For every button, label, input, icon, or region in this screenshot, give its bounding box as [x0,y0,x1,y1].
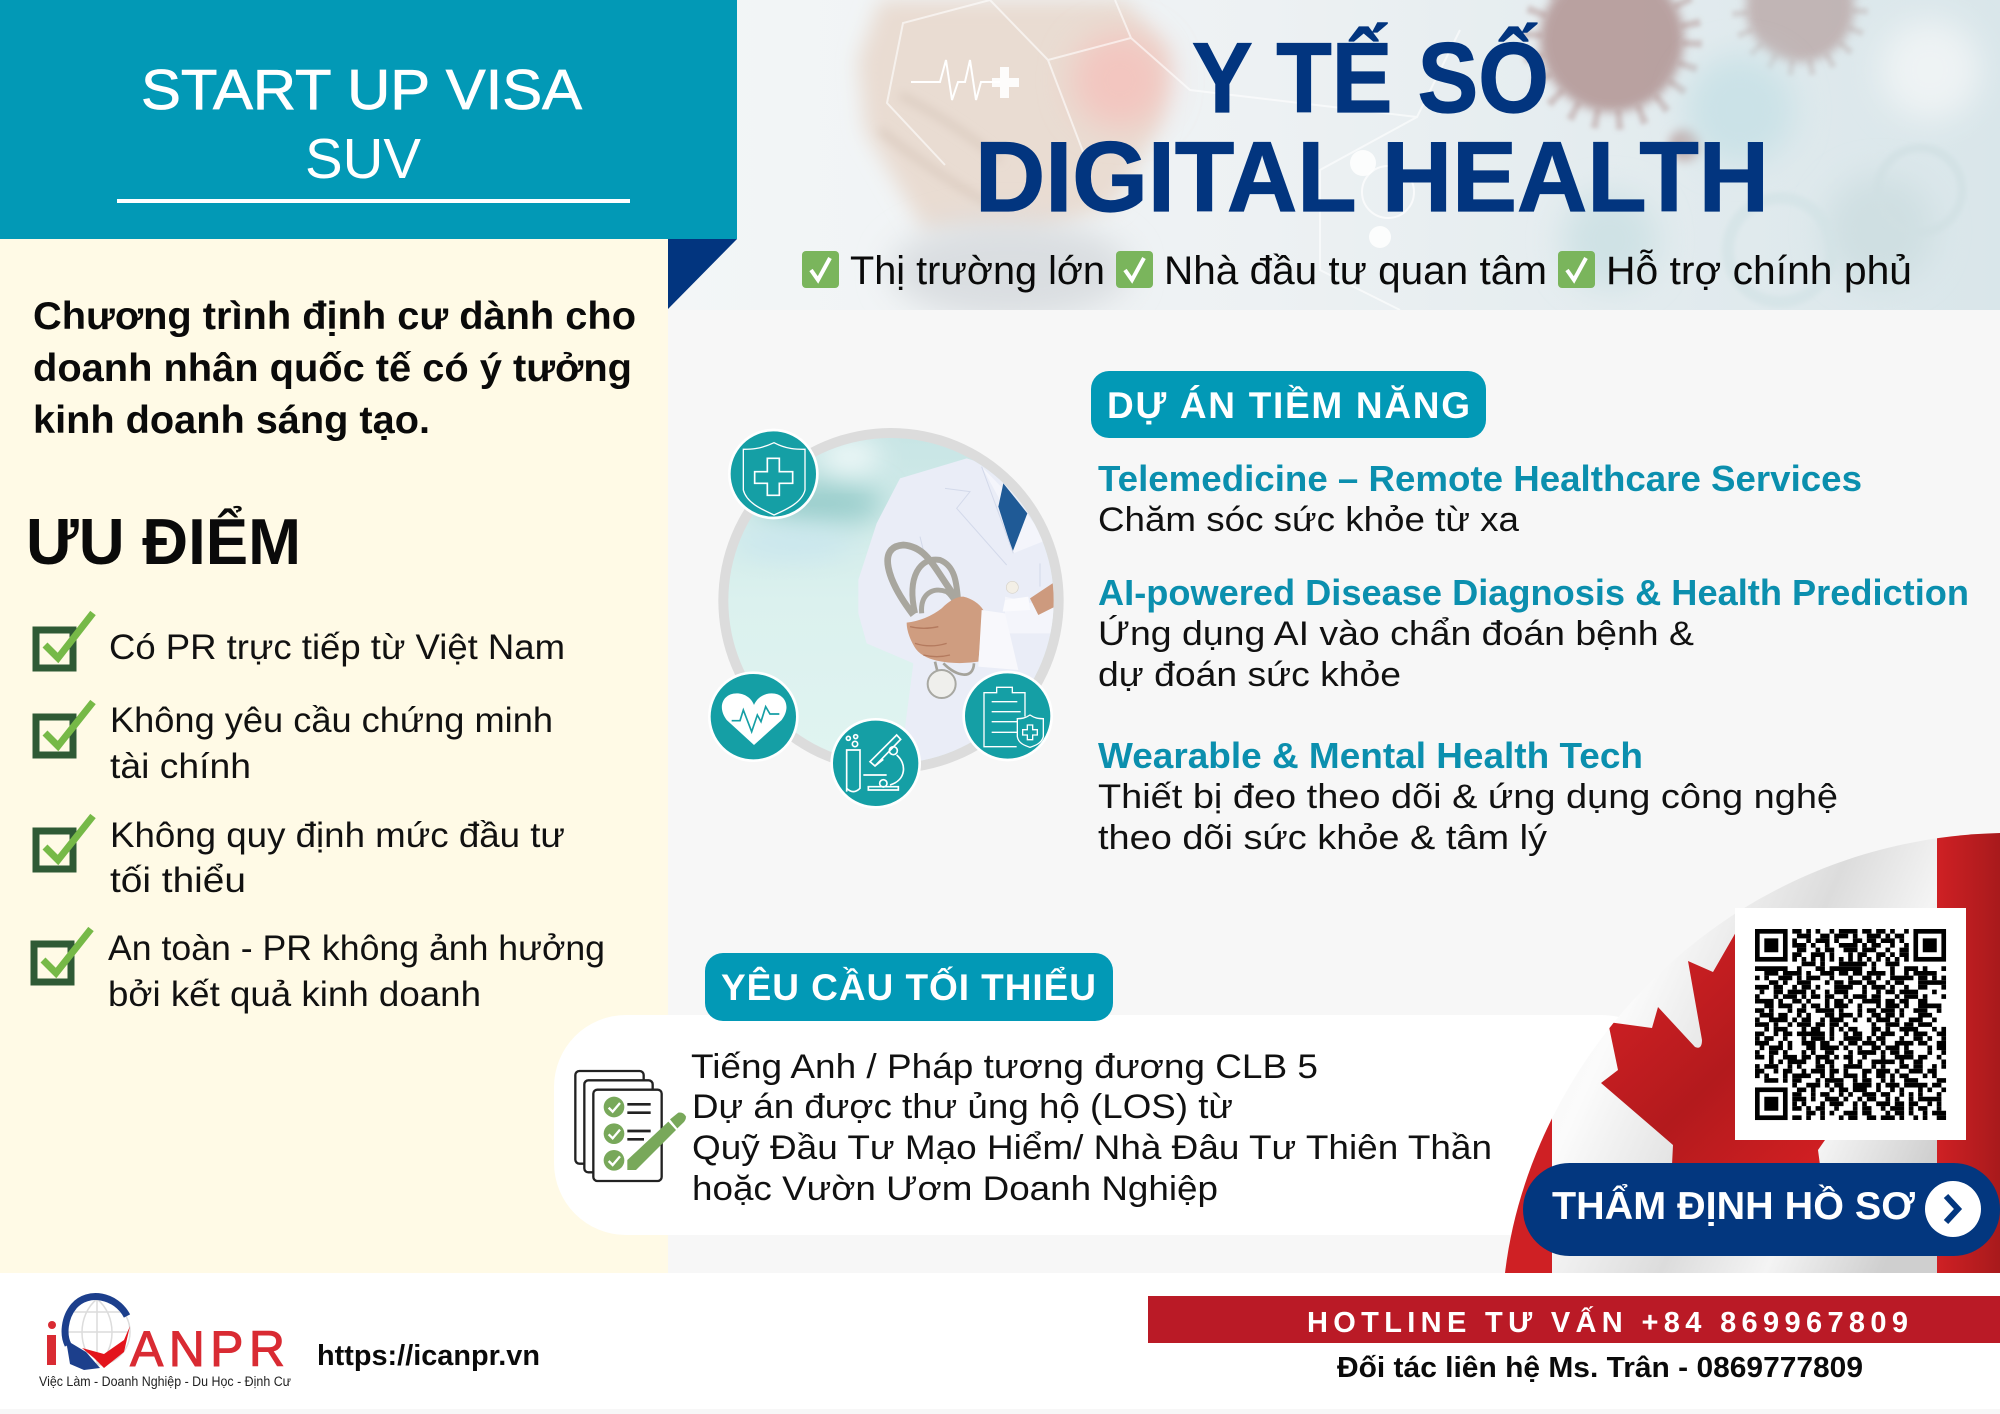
project: telemedicine: Telemedicine – Remote Healthcare Services [1098,458,1862,499]
panel: potential projects [1091,371,1969,857]
button: assess profile: THẨM ĐỊNH HỒ SƠ [1552,1183,1916,1228]
badge: minimum requirements [705,953,1113,1021]
ribbon triangle [668,239,737,309]
panel: minimum requirements card [554,1015,1674,1235]
header photo banner [850,0,2000,310]
website url: https://icanpr.vn [317,1340,540,1372]
intro text [33,295,636,442]
advantage item 2: tài chính [110,747,251,786]
advantage item 4 [34,929,605,1014]
subtitle benefits with check icons: Thị trường lớn [850,249,1105,293]
requirements text: Tiếng Anh / Pháp tương đương CLB 5 [691,1048,1318,1086]
title [975,22,1769,232]
hotline bar: HOTLINE TƯ VẤN +84 869967809 [1307,1305,1908,1339]
canada flag [1500,830,2000,1275]
project: wearable: Wearable & Mental Health Tech [1098,735,1643,776]
panel: start up visa header: SUV [305,127,421,191]
project: wearable [1098,735,1838,857]
icon: shield [729,430,817,518]
project: telemedicine: Chăm sóc sức khỏe từ xa [1098,501,1519,539]
requirements text: Dự án được thư ủng hộ (LOS) từ [692,1088,1233,1126]
qr code [1735,908,1966,1140]
title: DIGITAL HEALTH [975,121,1769,232]
advantage item 3: tối thiểu [110,861,246,900]
advantage item 2 [36,701,553,786]
project: ai diagnosis [1098,572,1969,694]
heading: advantages: ƯU ĐIỂM [26,505,301,578]
subtitle benefits with check icons [802,248,1912,293]
advantage item 4: bởi kết quả kinh doanh [108,975,481,1014]
project: wearable: theo dõi sức khỏe & tâm lý [1098,819,1547,857]
requirements text [691,1048,1492,1208]
intro text: Chương trình định cư dành cho [33,295,636,338]
project: ai diagnosis: AI-powered Disease Diagnosis & Health Prediction [1098,572,1969,613]
panel: start up visa header [0,0,737,239]
advantage item 1 [36,613,565,668]
icon: clipboard [964,672,1052,760]
logo [39,1297,291,1389]
panel: advantages column [0,239,668,1273]
icon: checklist with pencil [575,1071,686,1181]
doctor photo with icons [709,428,1064,807]
footer [0,1273,2000,1409]
partner contact: Đối tác liên hệ Ms. Trân - 0869777809 [1337,1352,1863,1384]
logo: ANPR [130,1321,285,1377]
requirements text: hoặc Vườn Ươm Doanh Nghiệp [692,1170,1218,1208]
badge: potential projects [1091,371,1486,438]
panel: start up visa header: START UP VISA [141,58,582,122]
icon: microscope [832,719,920,807]
advantage item 1: Có PR trực tiếp từ Việt Nam [109,628,565,667]
project: ai diagnosis: dự đoán sức khỏe [1098,656,1401,694]
requirements text: Quỹ Đầu Tư Mạo Hiểm/ Nhà Đâu Tư Thiên Thần [692,1129,1492,1167]
icon: heart pulse [709,673,797,761]
advantage item 3: Không quy định mức đầu tư [110,816,565,855]
subtitle benefits with check icons: Hỗ trợ chính phủ [1606,248,1912,293]
intro text: kinh doanh sáng tạo. [33,399,430,442]
project: wearable: Thiết bị đeo theo dõi & ứng dụng công nghệ [1098,778,1838,816]
title: Y TẾ SỐ [1192,22,1549,133]
badge: minimum requirements: YÊU CẦU TỐI THIỂU [721,966,1096,1008]
hotline bar [1148,1296,2000,1343]
logo: Việc Làm - Doanh Nghiệp - Du Học - Định Cư [39,1374,291,1389]
advantage item 2: Không yêu cầu chứng minh [110,701,553,740]
subtitle benefits with check icons: Nhà đầu tư quan tâm [1164,249,1547,293]
intro text: doanh nhân quốc tế có ý tưởng [33,347,632,390]
advantage item 3 [36,816,565,900]
badge: potential projects: DỰ ÁN TIỀM NĂNG [1107,385,1470,426]
project: telemedicine [1098,458,1862,539]
advantage item 4: An toàn - PR không ảnh hưởng [108,929,605,968]
button: assess profile [1523,1163,2000,1256]
project: ai diagnosis: Ứng dụng AI vào chẩn đoán bệnh & [1098,615,1694,653]
